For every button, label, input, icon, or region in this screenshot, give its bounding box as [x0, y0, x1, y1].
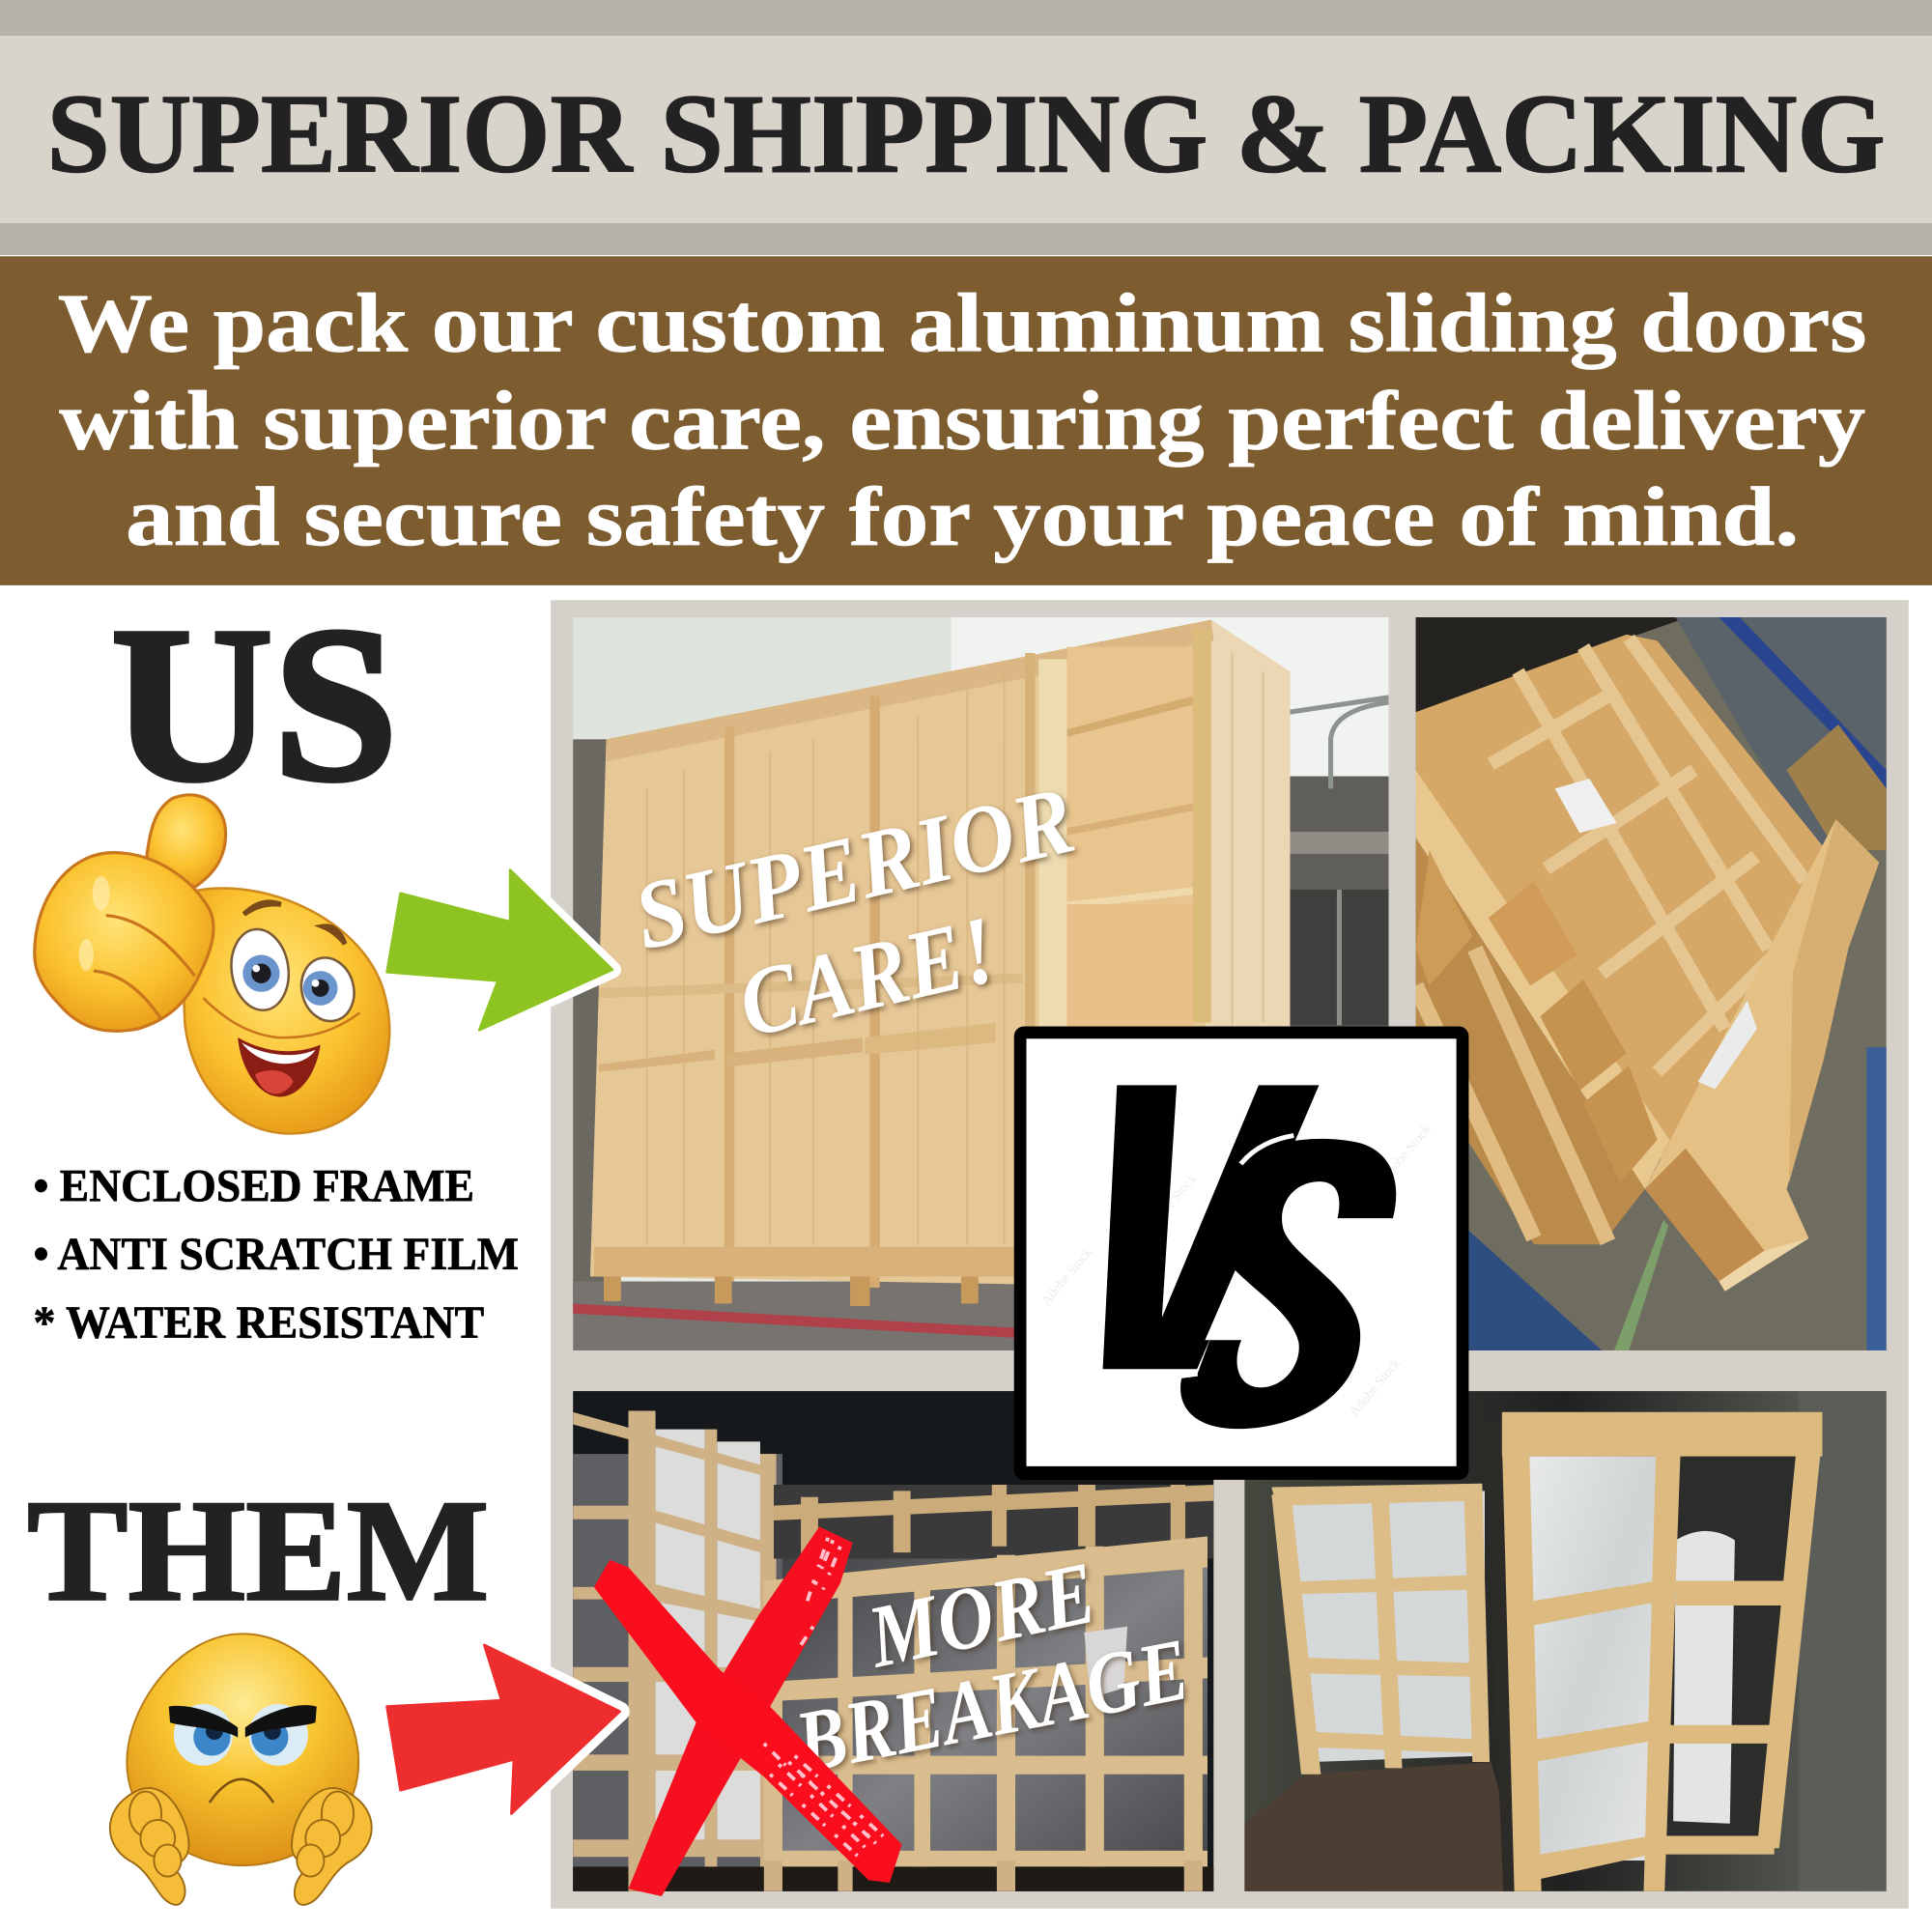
photo: plastic wrapped crates in container: [1244, 1391, 1887, 1891]
intro text: with superior care, ensuring perfect delivery: [59, 374, 1865, 467]
watermark: Adobe Stock: [1143, 1170, 1201, 1235]
photo: cheaper crates with wrap: [573, 1391, 1213, 1891]
intro banner: [0, 256, 1932, 585]
overlay text: superior care: SUPERIOR: [625, 765, 1083, 970]
watermark: [1038, 1121, 1435, 1419]
heading: US: US: [111, 581, 398, 827]
photo: crates lying in container: [1416, 617, 1887, 1350]
overlay text: superior care: [625, 765, 1083, 1058]
icon: angry thumbs down emoji: [110, 1634, 372, 1905]
heading: THEM: THEM: [27, 1470, 489, 1632]
intro text: [58, 277, 1866, 563]
icon: thumbs up smiling emoji: [35, 795, 389, 1133]
bullet list: • ANTI SCRATCH FILM: [33, 1230, 519, 1280]
photo: superior wooden crate front: [573, 617, 1389, 1350]
intro text: We pack our custom aluminum sliding doors: [58, 277, 1866, 370]
overlay text: superior care: CARE!: [729, 895, 1006, 1058]
header: top band: [0, 0, 1932, 36]
bullet list: * WATER RESISTANT: [33, 1298, 484, 1349]
header: title band: [0, 36, 1932, 255]
watermark: Adobe Stock: [1378, 1121, 1435, 1185]
watermark: Adobe Stock: [1279, 1306, 1336, 1370]
bullet list: [33, 1162, 519, 1349]
overlay text: more breakage: BREAKAGE: [787, 1619, 1197, 1792]
intro text: and secure safety for your peace of mind.: [126, 470, 1799, 563]
overlay text: more breakage: MORE: [859, 1543, 1104, 1687]
arrow: red: [387, 1645, 620, 1814]
watermark: Adobe Stock: [1038, 1244, 1096, 1309]
title: SUPERIOR SHIPPING & PACKING: [46, 72, 1886, 196]
arrow: green: [387, 870, 612, 1030]
VS badge: [1014, 1026, 1468, 1480]
panel: photo collage backdrop: [551, 600, 1909, 1909]
bullet list: • ENCLOSED FRAME: [33, 1162, 474, 1212]
watermark: Adobe Stock: [1347, 1355, 1405, 1419]
red X mark: [594, 1526, 902, 1896]
VS lettering: [1103, 1085, 1396, 1429]
overlay text: more breakage: [787, 1543, 1197, 1792]
